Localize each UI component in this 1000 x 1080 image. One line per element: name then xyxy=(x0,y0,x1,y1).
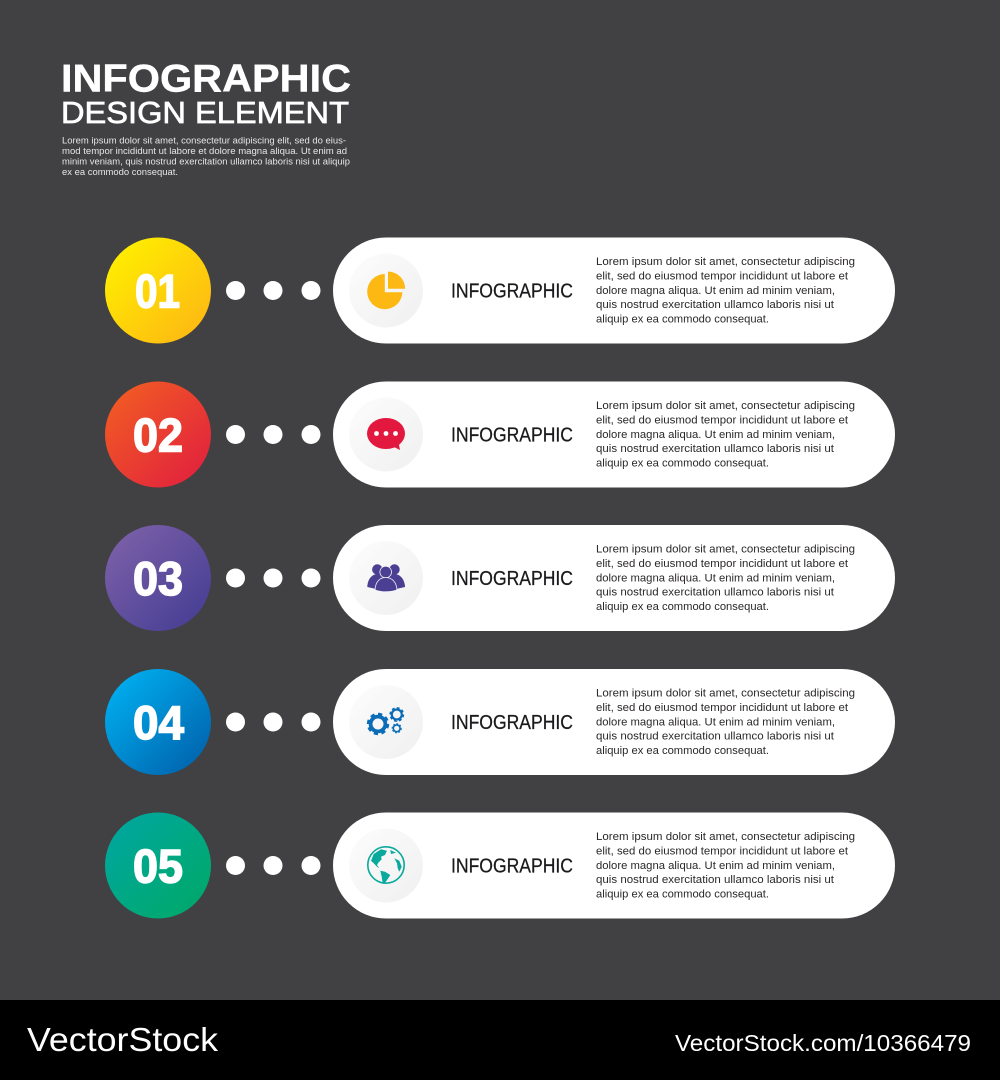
row 3 xyxy=(105,525,895,631)
label: INFOGRAPHIC xyxy=(451,856,573,878)
white pill panel xyxy=(333,525,895,631)
description xyxy=(596,688,855,757)
label: INFOGRAPHIC xyxy=(451,281,573,303)
description: quis nostrud exercitation ullamco laboris nisi ut xyxy=(596,587,834,599)
description: Lorem ipsum dolor sit amet, consectetur adipiscing xyxy=(596,400,855,412)
description xyxy=(596,544,855,613)
number badge 05 xyxy=(105,812,211,918)
row 4 xyxy=(105,669,895,775)
white pill panel xyxy=(333,238,895,344)
description: quis nostrud exercitation ullamco laboris nisi ut xyxy=(596,874,834,886)
number badge 02: 02 xyxy=(133,408,183,462)
number badge 03 xyxy=(105,525,211,631)
intro paragraph xyxy=(62,136,350,177)
number badge 04: 04 xyxy=(133,696,184,749)
icon: gears xyxy=(368,708,403,734)
icon: people group xyxy=(367,564,405,592)
footer logo: VectorStock xyxy=(27,1021,219,1058)
number badge 01 xyxy=(105,238,211,344)
connector dots xyxy=(226,712,320,732)
description xyxy=(596,256,855,325)
description: aliquip ex ea commodo consequat. xyxy=(596,888,769,900)
intro paragraph: ex ea commodo consequat. xyxy=(62,167,178,177)
icon: pie chart xyxy=(367,272,405,309)
number badge 01: 01 xyxy=(135,264,180,318)
title line 2: DESIGN ELEMENT xyxy=(61,95,349,130)
number badge 05: 05 xyxy=(133,840,183,892)
label: INFOGRAPHIC xyxy=(451,425,573,447)
description: Lorem ipsum dolor sit amet, consectetur adipiscing xyxy=(596,831,855,843)
icon: globe xyxy=(368,847,404,883)
number badge 02 xyxy=(105,382,211,488)
description: Lorem ipsum dolor sit amet, consectetur adipiscing xyxy=(596,544,855,556)
icon: speech bubble xyxy=(367,418,405,450)
white pill panel xyxy=(333,669,895,775)
description: dolore magna aliqua. Ut enim ad minim veniam, xyxy=(596,572,835,584)
description: elit, sed do eiusmod tempor incididunt ut labore et xyxy=(596,414,848,426)
description: quis nostrud exercitation ullamco laboris nisi ut xyxy=(596,443,834,455)
description: elit, sed do eiusmod tempor incididunt ut labore et xyxy=(596,846,848,858)
connector dots xyxy=(226,568,320,588)
label: INFOGRAPHIC xyxy=(451,568,573,590)
row 1 xyxy=(105,238,895,344)
title block xyxy=(61,58,351,177)
connector dots xyxy=(226,281,320,300)
icon disc xyxy=(349,541,423,615)
description xyxy=(596,831,855,900)
description: aliquip ex ea commodo consequat. xyxy=(596,601,769,613)
description: aliquip ex ea commodo consequat. xyxy=(596,313,769,325)
number badge 03: 03 xyxy=(133,552,183,605)
connector dots xyxy=(226,856,320,875)
description: quis nostrud exercitation ullamco laboris nisi ut xyxy=(596,299,834,311)
icon disc xyxy=(349,254,423,328)
icon disc xyxy=(349,685,423,759)
white pill panel xyxy=(333,812,895,918)
description: elit, sed do eiusmod tempor incididunt ut labore et xyxy=(596,270,848,282)
description: aliquip ex ea commodo consequat. xyxy=(596,457,769,469)
description: dolore magna aliqua. Ut enim ad minim veniam, xyxy=(596,285,835,297)
white pill panel xyxy=(333,382,895,488)
footer bar xyxy=(0,1000,1000,1080)
description: aliquip ex ea commodo consequat. xyxy=(596,745,769,757)
title line 1: INFOGRAPHIC xyxy=(61,58,351,100)
row 2 xyxy=(105,382,895,488)
intro paragraph: minim veniam, quis nostrud exercitation ullamco laboris nisi ut aliquip xyxy=(62,156,350,166)
intro paragraph: Lorem ipsum dolor sit amet, consectetur adipiscing elit, sed do eius- xyxy=(62,136,346,146)
description: dolore magna aliqua. Ut enim ad minim veniam, xyxy=(596,860,835,872)
description: Lorem ipsum dolor sit amet, consectetur adipiscing xyxy=(596,688,855,700)
description: quis nostrud exercitation ullamco laboris nisi ut xyxy=(596,731,834,743)
icon disc xyxy=(349,828,423,902)
description: Lorem ipsum dolor sit amet, consectetur adipiscing xyxy=(596,256,855,268)
row 5 xyxy=(105,812,895,918)
number badge 04 xyxy=(105,669,211,775)
intro paragraph: mod tempor incididunt ut labore et dolore magna aliqua. Ut enim ad xyxy=(62,146,347,156)
description: elit, sed do eiusmod tempor incididunt ut labore et xyxy=(596,702,848,714)
icon disc xyxy=(349,398,423,472)
footer url: VectorStock.com/10366479 xyxy=(675,1030,971,1056)
connector dots xyxy=(226,425,320,444)
description: dolore magna aliqua. Ut enim ad minim veniam, xyxy=(596,429,835,441)
description xyxy=(596,400,855,469)
label: INFOGRAPHIC xyxy=(451,712,573,734)
description: dolore magna aliqua. Ut enim ad minim veniam, xyxy=(596,716,835,728)
description: elit, sed do eiusmod tempor incididunt ut labore et xyxy=(596,558,848,570)
